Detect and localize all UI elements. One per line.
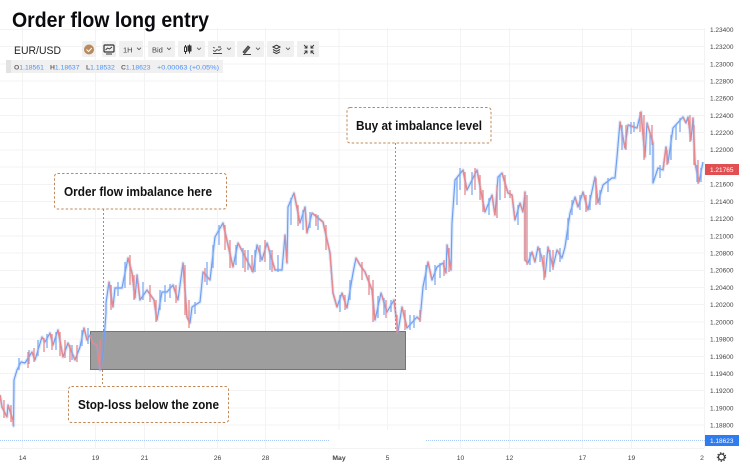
date axis: 5 (386, 455, 390, 462)
callout: order flow imbalance: Order flow imbalance here (64, 185, 212, 199)
chart toolbar: Bid (152, 46, 163, 54)
price axis: 1.19800 (710, 336, 734, 344)
price axis: 1.23000 (710, 62, 734, 68)
chart toolbar: 1H (123, 46, 133, 54)
icon: indicators (213, 47, 222, 54)
icon: pencil (243, 46, 251, 54)
candle wicks: blue (19, 118, 701, 370)
price axis: 1.23200 (710, 44, 734, 51)
date axis: 19 (628, 455, 635, 462)
callout: buy level: Buy at imbalance level (356, 119, 482, 133)
OHLC legend: L1.18532 (86, 64, 115, 72)
callout: stop-loss: Stop-loss below the zone (78, 398, 219, 412)
date axis: 28 (262, 455, 269, 462)
OHLC legend: O1.18561 (14, 64, 44, 72)
price axis: 1.19000 (710, 406, 734, 412)
date axis (19, 455, 704, 462)
current price tag (705, 435, 739, 446)
title: Order flow long entry (12, 9, 209, 32)
current price dotted line (0, 440, 705, 442)
symbol name: EUR/USD (14, 45, 61, 57)
price axis: 1.19400 (710, 371, 734, 378)
imbalance zone (90, 332, 406, 370)
icon: screen (104, 45, 114, 54)
date axis: 2 (700, 455, 704, 462)
date axis: 14 (19, 455, 26, 462)
callout: stop-loss (68, 370, 228, 422)
price axis: 1.20200 (710, 302, 734, 309)
price axis: 1.18800 (710, 422, 734, 430)
price axis: 1.23400 (710, 27, 734, 34)
icon: settings gear (717, 453, 726, 461)
icon: candles (184, 44, 191, 54)
callout: buy level (347, 108, 491, 331)
price axis: 1.20400 (710, 285, 734, 292)
callout: order flow imbalance (54, 174, 226, 331)
date axis: 21 (141, 455, 148, 462)
date axis: May (332, 455, 346, 462)
price axis: 1.21600 (710, 182, 734, 188)
price axis: 1.21200 (710, 216, 734, 223)
price axis: 1.20800 (710, 250, 734, 258)
candle wicks: red (4, 112, 698, 422)
date axis: 26 (214, 455, 221, 462)
price axis: 1.22400 (710, 113, 734, 120)
price axis: 1.21000 (710, 234, 734, 240)
date axis: 10 (457, 455, 464, 462)
price axis: 1.19600 (710, 354, 734, 361)
date axis: 19 (92, 455, 99, 462)
date axis: 17 (579, 455, 586, 462)
price axis: 1.21400 (710, 199, 734, 206)
price axis: 1.20600 (710, 268, 734, 274)
last price tag (705, 164, 739, 175)
current price tag: 1.18623 (710, 438, 734, 445)
OHLC legend: C1.18623 (121, 64, 151, 72)
last price tag: 1.21765 (710, 167, 734, 174)
icon: check badge (84, 44, 94, 54)
chart toolbar (14, 41, 319, 57)
icon: layers (273, 45, 280, 54)
OHLC legend: +0.00063 (+0.05%) (157, 64, 219, 72)
icon: collapse arrows (304, 45, 314, 54)
OHLC legend (6, 60, 223, 73)
price axis: 1.22800 (710, 78, 734, 86)
price axis: 1.22000 (710, 147, 734, 154)
price axis (710, 27, 734, 430)
price axis: 1.19200 (710, 388, 734, 395)
price axis: 1.22600 (710, 96, 734, 102)
date axis: 12 (506, 455, 513, 462)
price axis: 1.20000 (710, 320, 734, 326)
price chart (0, 112, 703, 426)
price axis: 1.22200 (710, 130, 734, 137)
OHLC legend: H1.18637 (50, 64, 80, 72)
